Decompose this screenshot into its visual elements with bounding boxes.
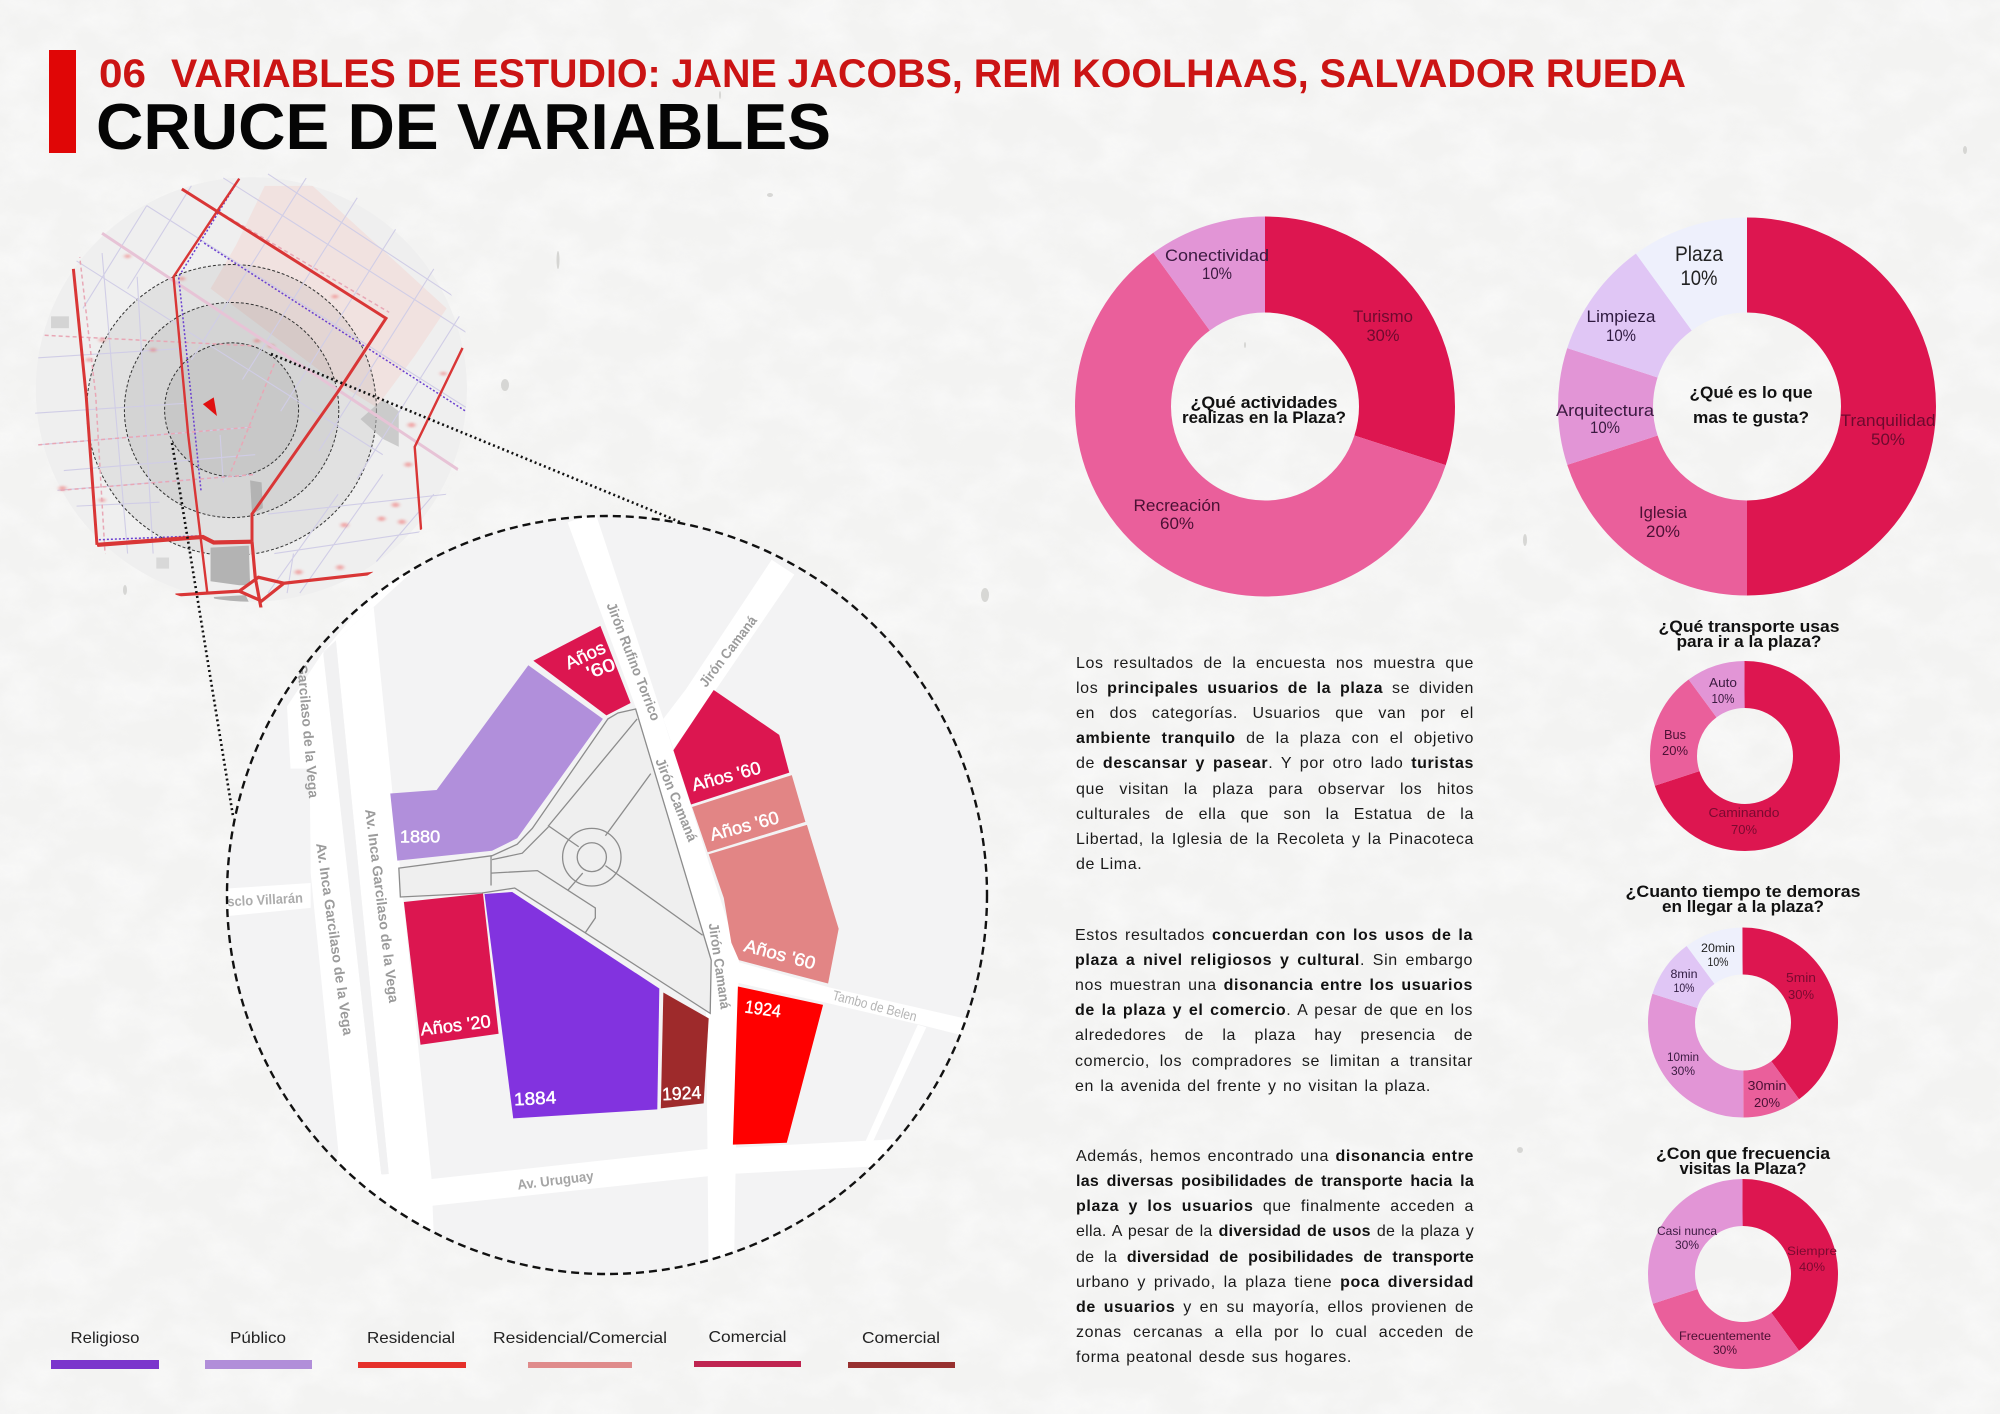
legend: religioso: Religioso <box>70 1330 140 1347</box>
street labels: Jirón Rufino Torrico <box>604 600 664 723</box>
text block: paragraph 3: las diversas posibilidades de transporte hacia la <box>1076 1173 1474 1190</box>
donut: que te gusta: ¿Qué es lo que <box>1690 384 1812 402</box>
donut: tiempo: 20min <box>1701 943 1735 955</box>
building: salmon upper <box>692 775 805 852</box>
building: dark pink right <box>673 690 789 804</box>
donut: tiempo: 10% <box>1708 957 1728 969</box>
donut: frecuencia: 30% <box>1713 1343 1737 1357</box>
donut: que te gusta: Plaza <box>1675 243 1723 266</box>
donut: que te gusta: mas te gusta? <box>1693 409 1809 427</box>
context map <box>35 174 467 611</box>
donut: actividades: ¿Qué actividades <box>1190 394 1338 412</box>
donut: tiempo: ¿Cuanto tiempo te demoras <box>1626 882 1860 901</box>
donut: frecuencia: Siempre <box>1787 1244 1837 1258</box>
building: dark pink top <box>533 626 631 715</box>
donut: que te gusta: 10% <box>1680 267 1718 290</box>
pink dashed routes <box>38 190 459 558</box>
donut: tiempo: 20% <box>1754 1095 1780 1110</box>
purple dotted routes <box>99 179 466 540</box>
building labels: Años '20 <box>419 1011 492 1039</box>
donut: tiempo: 8min <box>1670 969 1698 981</box>
donut: frecuencia: 30% <box>1675 1238 1699 1252</box>
building labels: 1884 <box>513 1087 557 1109</box>
text block: paragraph 3: de usuarios y en su mayoría, ellos provienen de <box>1076 1299 1474 1316</box>
donut: frecuencia: Casi nunca <box>1657 1224 1717 1238</box>
donut: que te gusta: Limpieza <box>1586 307 1656 326</box>
donut: que te gusta: 10% <box>1606 326 1636 345</box>
donut: tiempo: 30min <box>1748 1078 1786 1093</box>
donut: actividades: realizas en la Plaza? <box>1182 409 1346 427</box>
text block: paragraph 1: Libertad, la Iglesia de la Recoleta y la Pinacoteca <box>1076 831 1474 848</box>
text block: paragraph 3: zonas cercanas a ella por lo cual acceden de <box>1076 1324 1474 1341</box>
text block: paragraph 3: Además, hemos encontrado una disonancia entre <box>1076 1148 1474 1165</box>
building labels: Años '60 <box>742 935 818 973</box>
text block: paragraph 2: Estos resultados concuerdan con los usos de la <box>1075 927 1473 944</box>
legend: residencial <box>358 1330 466 1368</box>
text block: paragraph 1: de descansar y pasear. Y por otro lado turistas <box>1076 755 1474 772</box>
donut: tiempo: 5min <box>1786 970 1816 985</box>
street labels: Jirón Camaná <box>652 756 701 844</box>
location marker <box>203 397 217 416</box>
building labels: Años <box>562 637 609 673</box>
legend: residencial comercial: Residencial/Comercial <box>493 1330 667 1347</box>
text block: paragraph 2: de la plaza y el comercio. A pesar de que en los <box>1075 1002 1473 1019</box>
text block: paragraph 2: comercio, los compradores se limitan a transitar <box>1075 1053 1473 1070</box>
street labels: sclo Villarán <box>227 890 303 909</box>
donut: transporte: Auto <box>1709 675 1737 690</box>
donut: actividades: 60% <box>1160 514 1194 533</box>
donut: transporte: Bus <box>1664 727 1686 742</box>
building: red 1924 <box>733 987 823 1145</box>
street labels: Av. Inca Garcilaso de la Vega <box>313 842 356 1036</box>
legend: comercial dark: Comercial <box>862 1330 940 1347</box>
legend: comercial dark <box>848 1330 955 1368</box>
street labels <box>227 600 919 1193</box>
text block: paragraph 3 <box>1076 1148 1474 1366</box>
donut: que te gusta: Iglesia <box>1639 503 1688 522</box>
donut: transporte <box>1658 617 1840 837</box>
building: religious 1884 <box>484 892 659 1118</box>
red title bar <box>49 50 76 153</box>
street labels: Av. Inca Garcilaso de la Vega <box>362 808 402 1004</box>
donut: frecuencia: visitas la Plaza? <box>1680 1159 1806 1178</box>
legend: residencial comercial <box>493 1330 667 1368</box>
donut: transporte: ¿Qué transporte usas <box>1658 617 1840 636</box>
street labels: Garcilaso de la Vega <box>294 663 322 799</box>
donut: tiempo: en llegar a la plaza? <box>1662 897 1824 916</box>
street labels: Av. Uruguay <box>516 1168 595 1193</box>
donut: actividades: 10% <box>1202 264 1232 283</box>
donut: tiempo <box>1626 882 1860 1110</box>
donut: tiempo: 10% <box>1674 983 1694 995</box>
detail map: plaza lots <box>220 512 987 1286</box>
donut: actividades <box>1123 246 1413 548</box>
donut: actividades: Turismo <box>1353 307 1413 326</box>
donut: que te gusta: 10% <box>1590 418 1620 437</box>
text block: paragraph 1: que visitan la plaza para observar los hitos <box>1076 781 1474 798</box>
text block: paragraph 1: Los resultados de la encuesta nos muestra que <box>1076 655 1474 672</box>
donut: tiempo: 10min <box>1667 1052 1699 1064</box>
street labels: Jirón Camaná <box>706 922 734 1010</box>
text block: paragraph 1: los principales usuarios de la plaza se dividen <box>1076 680 1474 697</box>
street labels: Tambo de Belen <box>831 987 919 1024</box>
donut: frecuencia <box>1656 1144 1837 1357</box>
main title: CRUCE DE VARIABLES <box>96 90 831 163</box>
plaza outline and paths <box>399 709 711 1013</box>
donut: que te gusta <box>1556 243 1936 548</box>
influence rings <box>87 265 376 556</box>
building labels: Años '60 <box>690 758 763 795</box>
text block: paragraph 1: culturales de ella que son la Estatua de la <box>1076 806 1474 823</box>
text block: paragraph 3: ella. A pesar de la diversidad de usos de la plaza y <box>1076 1223 1474 1240</box>
building: brown 1924 <box>661 992 709 1108</box>
legend: religioso <box>51 1330 159 1369</box>
text block: paragraph 3: de la diversidad de posibilidades de transporte <box>1076 1249 1474 1266</box>
legend: residencial: Residencial <box>367 1330 455 1347</box>
donut: frecuencia: 40% <box>1799 1260 1825 1274</box>
building labels: 1924 <box>744 997 782 1021</box>
building: salmon lower <box>709 825 839 984</box>
donut: frecuencia: Frecuentemente <box>1679 1329 1771 1343</box>
text block: paragraph 1: ambiente tranquilo de la plaza con el objetivo <box>1076 730 1474 747</box>
text block: paragraph 2: nos muestran una disonancia entre los usuarios <box>1075 977 1473 994</box>
donut: transporte: para ir a la plaza? <box>1676 632 1822 651</box>
donut: frecuencia: ¿Con que frecuencia <box>1656 1144 1831 1163</box>
building labels: Años '60 <box>708 807 781 845</box>
legend: comercial: Comercial <box>708 1329 786 1346</box>
text block: paragraph 2: en la avenida del frente y no visitan la plaza. <box>1075 1078 1431 1095</box>
legend: publico <box>205 1330 312 1369</box>
text block: paragraph 1: en dos categorías. Usuarios que van por el <box>1076 705 1474 722</box>
text block: paragraph 3: plaza y los usuarios que finalmente acceden a <box>1076 1198 1474 1215</box>
building labels: 1924 <box>662 1083 702 1104</box>
donut: actividades: Recreación <box>1134 496 1220 515</box>
donut: transporte: 20% <box>1662 743 1688 758</box>
street labels: Jirón Camaná <box>696 613 760 690</box>
donut: que te gusta: 20% <box>1646 522 1680 541</box>
donut: actividades: Conectividad <box>1165 246 1269 265</box>
text block: paragraph 3: urbano y privado, la plaza tiene poca diversidad <box>1076 1274 1474 1291</box>
text block: paragraph 3: forma peatonal desde sus hogares. <box>1076 1349 1352 1366</box>
donut: transporte: 10% <box>1712 691 1735 706</box>
text block: paragraph 2 <box>1075 927 1473 1095</box>
building: public 1880 <box>390 665 603 861</box>
building labels: '60 <box>584 654 618 683</box>
donut: tiempo: 30% <box>1788 987 1814 1002</box>
donut: que te gusta: Arquitectura <box>1556 401 1655 420</box>
donut: actividades: 30% <box>1366 326 1400 345</box>
text block: paragraph 2: plaza a nivel religiosos y cultural. Sin embargo <box>1075 952 1473 969</box>
pink study zone <box>211 186 447 407</box>
donut: que te gusta: Tranquilidad <box>1840 411 1936 430</box>
donut: que te gusta: 50% <box>1871 430 1905 449</box>
activity hot spots <box>59 254 447 575</box>
donut: transporte: 70% <box>1731 822 1757 837</box>
legend: comercial <box>694 1329 801 1367</box>
building labels: 1880 <box>400 826 440 846</box>
text block: paragraph 2: alrededores de la plaza hay presencia de <box>1075 1027 1473 1044</box>
donut: transporte: Caminando <box>1708 805 1780 820</box>
legend: publico: Público <box>230 1330 286 1347</box>
building labels <box>400 637 818 1109</box>
text block: paragraph 1: de Lima. <box>1076 856 1142 873</box>
subtitle heading: 06 <box>99 52 146 96</box>
building: dark pink lower left <box>404 893 499 1045</box>
text block: paragraph 1 <box>1076 655 1474 873</box>
detail map dashed outline <box>227 516 987 1274</box>
subtitle heading: VARIABLES DE ESTUDIO: JANE JACOBS, REM KOOLHAAS, SALVADOR RUEDA <box>171 52 1686 96</box>
leader lines <box>172 354 680 816</box>
red main streets <box>73 179 463 611</box>
donut: tiempo: 30% <box>1671 1066 1695 1078</box>
legend <box>51 1329 955 1369</box>
